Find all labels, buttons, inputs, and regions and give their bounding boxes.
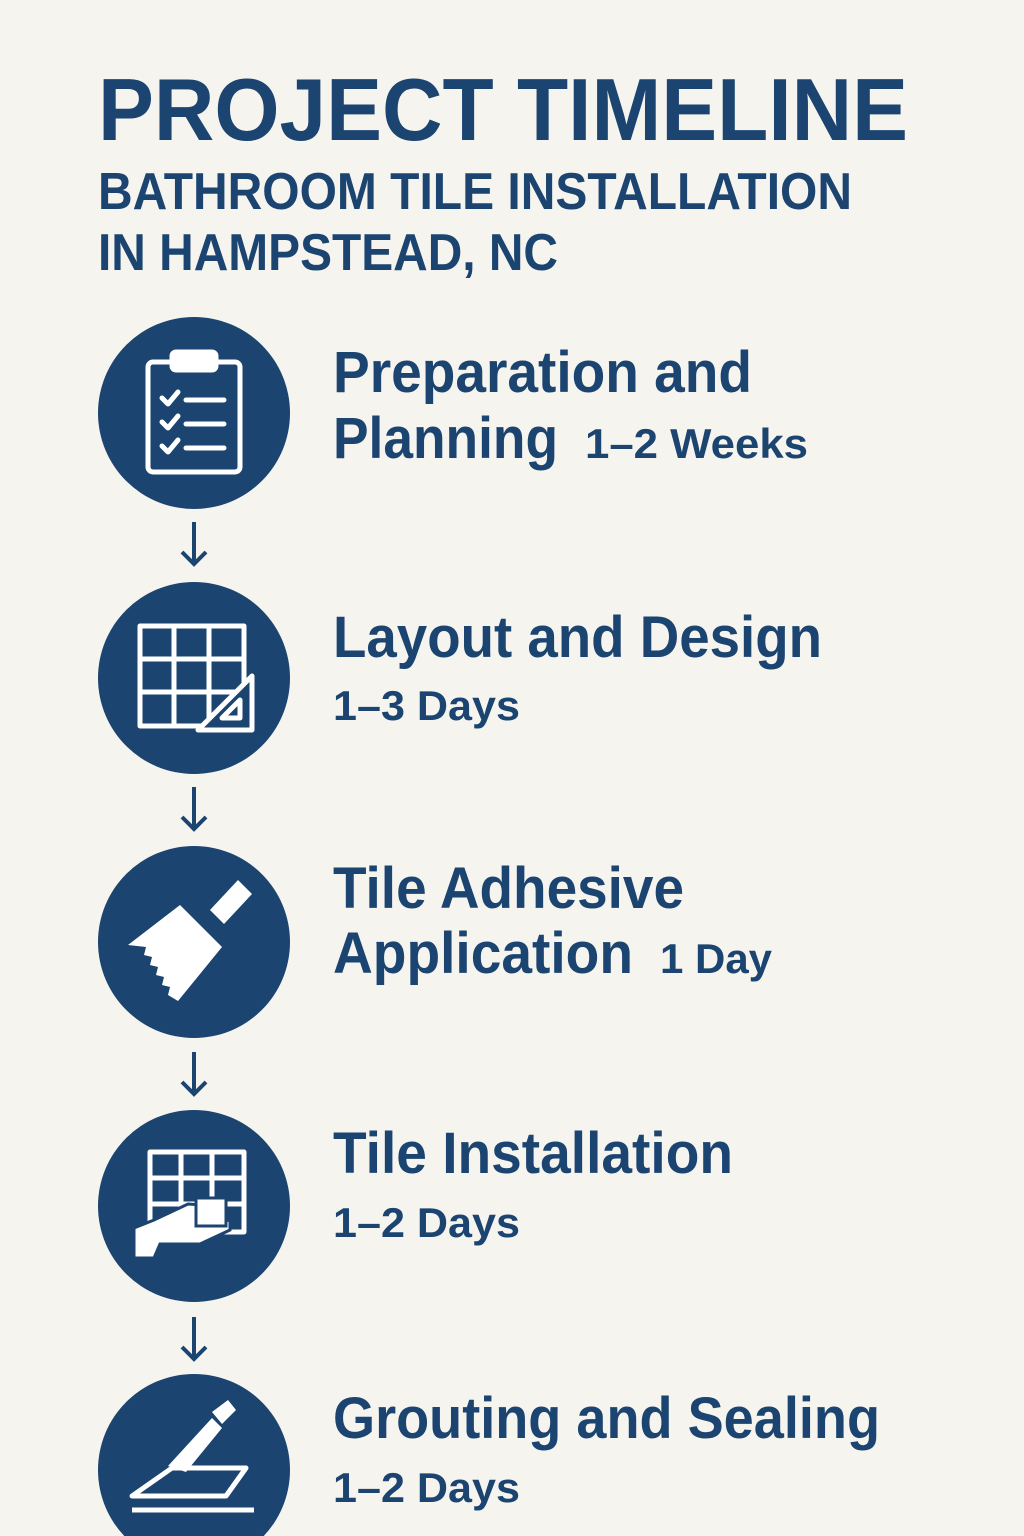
- step 4: tile installation: [98, 1110, 733, 1302]
- subtitle: BATHROOM TILE INSTALLATION: [98, 163, 852, 221]
- arrow: [182, 1052, 206, 1094]
- title: PROJECT TIMELINE: [98, 60, 908, 159]
- step 5: grouting and sealing: Grouting and Sealing: [333, 1386, 880, 1451]
- step 2: layout and design: 1–3 Days: [333, 682, 520, 729]
- step 3: tile adhesive application: [98, 846, 773, 1038]
- icon: hand placing tile: [98, 1110, 290, 1302]
- step 3: tile adhesive application: 1 Day: [660, 935, 773, 982]
- arrow: [182, 1317, 206, 1359]
- subtitle: IN HAMPSTEAD, NC: [98, 224, 558, 282]
- step 1: preparation and planning: 1–2 Weeks: [585, 420, 808, 467]
- icon: notched trowel: [98, 846, 290, 1038]
- icon: clipboard: [98, 317, 290, 509]
- arrow: [182, 787, 206, 829]
- step 4: tile installation: 1–2 Days: [333, 1199, 520, 1246]
- step 5: grouting and sealing: 1–2 Days: [333, 1464, 520, 1511]
- step 2: layout and design: Layout and Design: [333, 605, 822, 670]
- subtitle: [98, 163, 852, 282]
- step 1: preparation and planning: Preparation and: [333, 340, 752, 405]
- step 4: tile installation: Tile Installation: [333, 1121, 733, 1186]
- step 3: tile adhesive application: Application: [333, 921, 633, 986]
- step 1: preparation and planning: Planning: [333, 406, 558, 471]
- icon: grout float: [98, 1374, 290, 1536]
- icon: tile grid with set square: [98, 582, 290, 774]
- step 2: layout and design: [98, 582, 822, 774]
- step 1: preparation and planning: [98, 317, 808, 509]
- step 3: tile adhesive application: Tile Adhesive: [333, 856, 684, 921]
- arrow: [182, 522, 206, 564]
- step 5: grouting and sealing: [98, 1374, 880, 1536]
